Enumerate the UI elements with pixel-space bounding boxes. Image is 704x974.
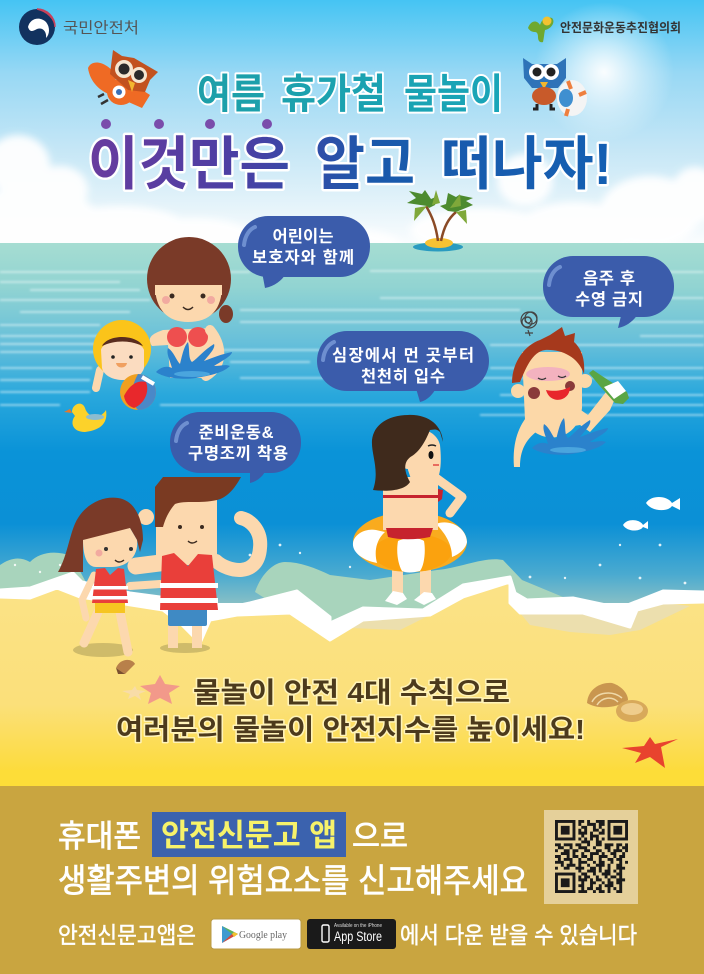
clouds <box>0 135 704 262</box>
speech bubble: warm-up and life vest <box>170 412 301 483</box>
QR code <box>544 810 638 904</box>
drunk swimmer <box>511 312 629 467</box>
man <box>130 477 260 653</box>
woman with swim ring <box>353 415 467 605</box>
shell small <box>116 660 135 674</box>
owl mascot: red flying <box>88 50 158 108</box>
speech bubble: children with guardian: 보호자와 함께 <box>252 248 354 267</box>
starfish pink <box>140 675 180 704</box>
wave white foam <box>0 573 704 643</box>
download label end: 에서 다운 받을 수 있습니다 <box>400 922 637 948</box>
app store button: Available on the iPhone <box>334 923 382 929</box>
mother and baby <box>64 237 233 432</box>
report line 1: 으로 <box>352 819 408 854</box>
starfish small pale <box>122 686 146 700</box>
speech bubble: enter slowly <box>317 331 489 402</box>
sea <box>0 243 704 603</box>
title line 2: 떠나자! <box>441 132 612 197</box>
speech bubble: children with guardian: 어린이는 <box>272 227 334 246</box>
app store button: App Store <box>334 929 382 944</box>
title line 2: 알고 <box>315 132 415 197</box>
report line 1 <box>58 812 408 857</box>
mother <box>147 237 233 379</box>
fish <box>623 497 680 531</box>
baby <box>93 320 151 388</box>
title line 1: 휴가철 <box>281 71 386 117</box>
ministry name: 국민안전처 <box>63 19 139 37</box>
report line 1: 휴대폰 <box>58 819 141 854</box>
footer panel <box>0 786 704 974</box>
beach ball <box>120 374 156 410</box>
google play button <box>211 919 301 949</box>
wet sand shadow <box>350 603 690 635</box>
highlighted app name: 안전신문고 앱 <box>161 818 337 853</box>
message text <box>116 677 585 745</box>
palm island <box>407 190 473 252</box>
wave teal foam <box>0 553 640 640</box>
google play button: Google play <box>239 930 287 941</box>
rubber duck <box>64 404 106 432</box>
sea streaks <box>0 271 704 415</box>
logo: ministry of public safety <box>19 9 139 45</box>
speech bubble: children with guardian <box>238 216 370 288</box>
speech bubble: no swimming after drinking <box>543 256 674 328</box>
download label: 안전신문고앱은 <box>58 922 196 948</box>
title line 1: 물놀이 <box>404 71 503 117</box>
logo: safety culture council <box>528 16 681 42</box>
dizzy scribble <box>521 312 537 336</box>
shells <box>587 683 648 722</box>
bottle <box>589 370 629 404</box>
sun glow <box>534 2 674 142</box>
sand base band <box>0 770 704 786</box>
girl <box>58 498 143 657</box>
speech bubble: warm-up and life vest: 구명조끼 착용 <box>188 444 288 463</box>
speech bubble: no swimming after drinking: 음주 후 <box>583 269 635 288</box>
speech bubble: enter slowly: 천천히 입수 <box>361 367 445 386</box>
title line 2 <box>88 119 612 197</box>
title line 2: 이것만은 <box>88 132 290 197</box>
message text: 여러분의 물놀이 안전지수를 높이세요! <box>116 714 585 745</box>
starfish red <box>622 737 678 768</box>
sky background <box>0 0 704 245</box>
speech bubble: warm-up and life vest: 준비운동& <box>198 423 274 442</box>
title line 1: 여름 <box>197 71 265 117</box>
speech bubble: no swimming after drinking: 수영 금지 <box>575 290 643 309</box>
title line 1 <box>197 71 503 117</box>
man and girl in life vests <box>58 477 260 657</box>
council name: 안전문화운동추진협의회 <box>560 20 681 35</box>
swim ring <box>353 512 467 572</box>
sand <box>0 582 704 786</box>
report line 2: 생활주변의 위험요소를 신고해주세요 <box>58 862 528 899</box>
speech bubble: enter slowly: 심장에서 먼 곳부터 <box>332 346 474 365</box>
owl mascot: blue with tube <box>523 58 587 116</box>
message text: 물놀이 안전 4대 수칙으로 <box>193 677 510 708</box>
app store button <box>307 919 396 949</box>
spray speckles <box>14 544 686 584</box>
